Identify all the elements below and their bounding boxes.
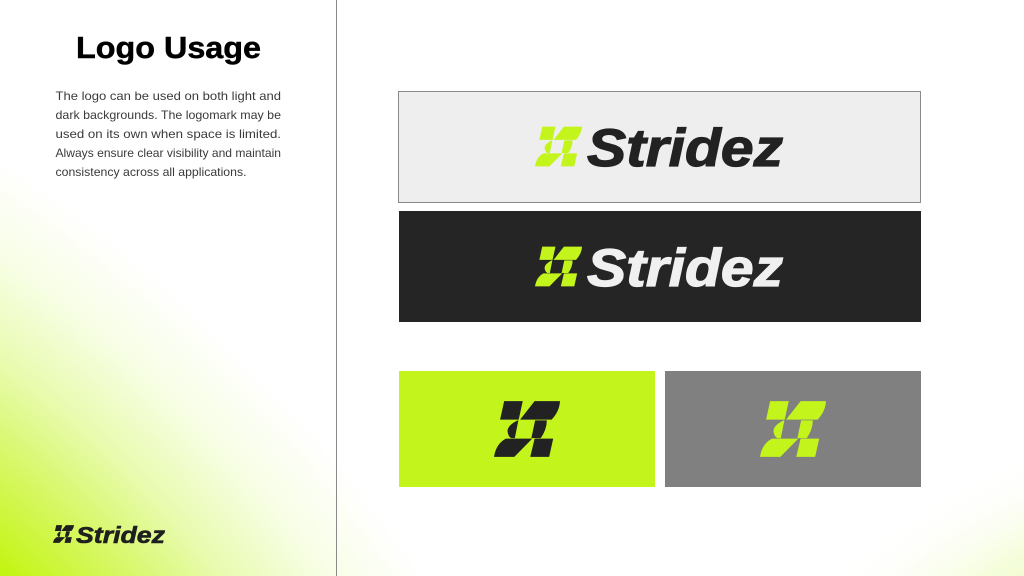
title: Logo Usage (76, 30, 261, 65)
description text (56, 89, 281, 179)
wordmark dark: Stridez (587, 119, 784, 178)
icon: lime logomark on dark (535, 247, 582, 286)
icon: footer logomark (53, 525, 74, 543)
footer wordmark: Stridez (76, 522, 166, 548)
icon: lime logomark on gray (760, 401, 826, 457)
description text: The logo can be used on both light and (56, 89, 281, 103)
footer logo (53, 522, 166, 548)
panel: logomark on lime (399, 371, 655, 487)
vertical divider (336, 0, 337, 576)
panel: logomark on gray (665, 371, 921, 487)
icon: lime logomark (535, 127, 582, 166)
description text: used on its own when space is limited. (56, 127, 281, 141)
description text: dark backgrounds. The logomark may be (56, 108, 281, 122)
wordmark light: Stridez (587, 239, 784, 298)
panel: logo on dark background (399, 211, 921, 322)
icon: dark logomark (494, 401, 560, 457)
description text: Always ensure clear visibility and maintain (56, 146, 281, 160)
panel: logo on light background (398, 92, 920, 202)
description text: consistency across all applications. (56, 165, 247, 179)
